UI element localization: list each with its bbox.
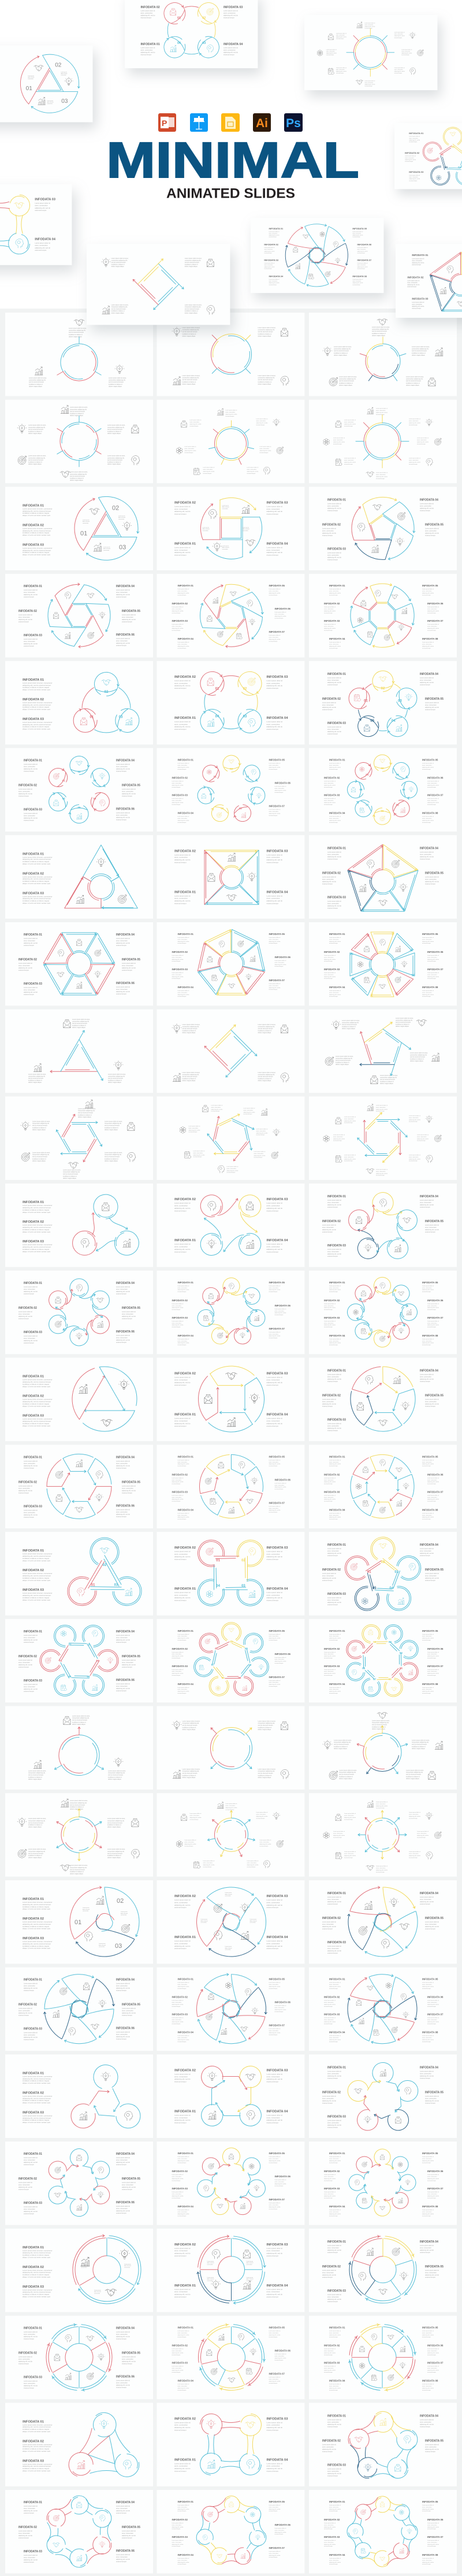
slide: ring 4 [157, 313, 305, 396]
slide: double ring circles 8: 02 [373, 1640, 377, 1643]
slide: segmented circle triangle [5, 474, 160, 582]
slide: numbered circles 3 [5, 661, 158, 758]
slide: numbered circles 6 [5, 748, 153, 832]
slide: outward arrows ring 5 [309, 1706, 457, 1790]
slide: numbered circles 8: 07 [366, 803, 369, 806]
floating slide: top middle, numbered circles [125, 0, 258, 85]
slide: segmented circle inner arrows heptagon [152, 1407, 311, 1566]
slide: numbered circles 7: 07 [210, 793, 213, 796]
slide: aperture swirl 3 [5, 1875, 153, 1969]
slide: double ring circles 6 [5, 1601, 153, 1721]
slide: aperture swirl 8 [309, 1945, 457, 2073]
slide: outward arrows ring 7 [157, 1793, 305, 1877]
slide: double ring circles 8: 01 [362, 1651, 366, 1654]
slide: numbered circles 6: 03 [93, 780, 96, 782]
slide: numbered circles 7: 03 [246, 775, 249, 778]
slide: segmented circle inner arrows pentagon [295, 1311, 462, 1487]
slide: linked circles 4 [157, 1165, 305, 1285]
slide: numbered circles 8: 02 [381, 767, 384, 770]
slide: numbered circles 7: 04 [250, 793, 254, 796]
slide: numbered circles 5: 05 [370, 719, 375, 723]
slide: numbered circles 4: 02 [243, 687, 247, 691]
slide: double ring circles 3: 01 [91, 1584, 95, 1587]
slide: numbered circles 6: 06 [62, 797, 65, 800]
slide: thick ring sectors 4 [157, 2229, 305, 2312]
slide: numbered circles 8: 04 [402, 788, 405, 791]
floating slide: top right, ring with ticks [304, 15, 437, 90]
slide: blob circles 7 [157, 2489, 305, 2576]
slide: aperture swirl 3: 01 [74, 1919, 81, 1926]
slide: ring 7 [157, 400, 305, 483]
slide: aperture swirl 5 [309, 1873, 457, 1970]
icon: Keynote [190, 113, 208, 132]
slide: segmented circle inner arrows hexagon [5, 1426, 153, 1547]
slide: polygon sectors octagon [309, 922, 457, 1005]
slide: ring 6 [5, 400, 153, 483]
slide: numbered circles 6: 05 [77, 806, 81, 809]
slide: linked circles 7 [157, 1271, 305, 1354]
slide: double ring circles 8: 06 [389, 1678, 392, 1681]
slide: numbered circles 6: 04 [93, 797, 96, 800]
slide: numbered circles 4: 03 [243, 715, 247, 718]
slide: segmented circle inner arrows triangle [5, 1342, 162, 1456]
slide: numbered circles 7: 05 [239, 807, 242, 810]
icon: PowerPoint: P [162, 118, 167, 128]
slide: double ring circles 5: 02 [381, 1561, 385, 1564]
title: MINIMAL [106, 132, 359, 188]
icon: Google Slides [221, 113, 240, 132]
floating slide: right, double ring circles [394, 123, 462, 194]
slide: numbered circles 3: 02 [105, 691, 109, 694]
slide: thick ring sectors 8 [309, 2308, 457, 2407]
slide: arrow polygon triangle [5, 1009, 153, 1093]
slide: segmented circle pentagon [309, 463, 457, 593]
slide: outward arrows ring 4 [157, 1706, 305, 1790]
slide: blob circles 5 [309, 2403, 457, 2496]
slide: blob circles 6 [5, 2490, 153, 2574]
slide: outward arrows ring 6 [5, 1793, 153, 1877]
floating slide: lower middle, arrow square [87, 244, 230, 325]
slide: double ring circles 4: 01 [216, 1559, 221, 1562]
slide: double ring circles 6: 02 [68, 1643, 72, 1646]
slide: numbered circles 4 [157, 642, 305, 763]
slide: double ring circles 7: 07 [211, 1664, 214, 1666]
slide: numbered circles 7 [157, 748, 305, 832]
slide: double ring circles 8: 08 [362, 1667, 366, 1670]
slide: polygon sectors hexagon [5, 922, 153, 1005]
slide: double ring circles 8: 07 [373, 1678, 377, 1681]
icon: Photoshop: Ps [286, 117, 301, 130]
slide: polygon sectors pentagon [309, 835, 457, 932]
slide: numbered circles 4: 01 [215, 687, 219, 691]
slide: numbered circles 8: 01 [366, 773, 369, 776]
slide: segmented circle octagon [309, 557, 457, 674]
slide: ring 8 [309, 400, 457, 483]
floating slide: left, segmented circle [0, 34, 99, 133]
slide: segmented circle triangle: 03 [119, 544, 126, 551]
slide: double ring circles 6: 05 [87, 1675, 90, 1678]
slide: linked circles 6 [5, 1271, 153, 1354]
slide: double ring circles 7 [157, 1619, 305, 1704]
slide: double ring circles 6: 03 [87, 1643, 90, 1646]
slide: numbered circles 7: 01 [214, 775, 217, 778]
slide: segmented circle hexagon [5, 567, 153, 665]
slide: arrow polygon square [157, 1009, 305, 1093]
slide: aperture swirl 3: 03 [115, 1943, 122, 1950]
slide: segmented circle triangle: 02 [112, 504, 119, 511]
app icons row [158, 113, 303, 132]
slide: double ring circles 5: 01 [367, 1571, 371, 1574]
slide: arrow polygon hexagon [5, 1097, 153, 1180]
slide: polygon sectors heptagon [157, 920, 305, 1011]
slide: thick ring sectors 6 [5, 2309, 153, 2406]
slide: double ring circles 6: 01 [59, 1659, 62, 1662]
slide: connected circles 5 [309, 2054, 457, 2141]
slide: double ring circles 6: 04 [96, 1659, 99, 1662]
slide: double ring circles 5 [309, 1532, 457, 1621]
slide: numbered circles 8: 05 [396, 803, 399, 806]
slide: segmented circle triangle: 01 [80, 530, 87, 537]
icon: Photoshop [284, 113, 303, 132]
slide: numbered circles 3: 03 [119, 715, 123, 719]
slide: segmented circle square [157, 487, 305, 570]
slide: numbered circles 8: 08 [359, 788, 363, 791]
slide: numbered circles 6: 02 [77, 770, 81, 773]
slide: segmented circle inner arrows square [157, 1353, 305, 1445]
slide: aperture swirl 3: 02 [117, 1898, 124, 1905]
slide: blob circles 3 [5, 2403, 153, 2496]
slide: connected circles 6 [5, 2141, 153, 2225]
slide: double ring circles 3 [5, 1532, 154, 1618]
slide: double ring circles 4 [157, 1508, 305, 1638]
slide: numbered circles 8: 06 [381, 810, 384, 812]
slide: outward arrows ring 3 [5, 1706, 153, 1793]
slide: double ring circles 7: 02 [230, 1640, 233, 1643]
slide: linked circles 3 [5, 1183, 153, 1271]
slide: double ring circles 6: 06 [68, 1675, 72, 1678]
icon: PowerPoint [158, 113, 176, 132]
slide: connected circles 4 [157, 2038, 305, 2154]
slide: aperture swirl 6 [5, 1944, 153, 2074]
slide: linked circles 5 [309, 1183, 457, 1271]
slide: connected circles 3 [5, 2054, 153, 2138]
slide: aperture swirl 7 [157, 1960, 305, 2058]
slide: double ring circles 7: 04 [248, 1664, 252, 1666]
slide: arrow polygon pentagon [309, 1009, 457, 1093]
slide: double ring circles 3: 02 [103, 1564, 107, 1567]
slide: double ring circles 8: 05 [400, 1667, 403, 1670]
slide: double ring circles 5: 04 [389, 1587, 394, 1590]
slide: double ring circles 4: 04 [216, 1584, 221, 1588]
slide: ring 5 [309, 313, 457, 396]
icon: Illustrator [253, 113, 271, 132]
slide: numbered circles 6: 01 [62, 780, 65, 782]
slide: ring 3 [5, 313, 153, 397]
slide: polygon sectors triangle [5, 835, 153, 925]
slide: thick ring sectors 3 [5, 2220, 157, 2319]
slide: double ring circles 4: 02 [241, 1559, 245, 1562]
slide: segmented circle heptagon [157, 543, 305, 688]
slide: polygon sectors square [157, 835, 305, 919]
slide: numbered circles 8 [309, 748, 457, 832]
icon: Illustrator: Ai [256, 117, 268, 130]
slide: numbered circles 5: 03 [398, 699, 402, 703]
slide: numbered circles 7: 06 [221, 807, 224, 810]
slide: double ring circles 7: 03 [245, 1647, 248, 1650]
slide: thick ring sectors 5 [309, 2219, 457, 2319]
slide: blob circles 4 [157, 2384, 305, 2506]
slide: numbered circles 5: 01 [364, 699, 368, 703]
floating slide: left, blob circles [0, 165, 72, 284]
slide: double ring circles 8: 03 [389, 1640, 392, 1643]
slide: arrow polygon octagon [309, 1097, 457, 1180]
floating slide: aperture swirl [251, 198, 383, 313]
slide: numbered circles 4: 04 [215, 715, 219, 718]
slide: linked circles 8 [309, 1271, 457, 1354]
slide: connected circles 8 [309, 2141, 457, 2225]
slide: double ring circles 8 [309, 1606, 457, 1715]
slide: numbered circles 8: 03 [396, 773, 399, 776]
slide: numbered circles 5: 04 [392, 719, 396, 723]
slide: double ring circles 7: 05 [238, 1676, 241, 1679]
slide: double ring circles 3: 03 [114, 1584, 118, 1587]
slide: thick ring sectors 7 [157, 2308, 305, 2407]
slide: double ring circles 7: 06 [222, 1676, 225, 1679]
subtitle: ANIMATED SLIDES [166, 186, 295, 201]
slide: double ring circles 4: 03 [241, 1584, 245, 1588]
slide: segmented circle inner arrows octagon [309, 1428, 457, 1545]
slide: aperture swirl 4 [157, 1872, 305, 1972]
slide: double ring circles 8: 04 [400, 1651, 403, 1654]
slide: double ring circles 7: 01 [215, 1647, 218, 1650]
floating slide: lower right, polygon sectors [396, 244, 462, 329]
slide: numbered circles 5: 02 [381, 687, 385, 691]
slide: double ring circles 5: 05 [372, 1587, 377, 1590]
slide: arrow polygon heptagon [157, 1097, 305, 1180]
slide: numbered circles 3: 01 [90, 715, 94, 719]
slide: numbered circles 5 [309, 659, 457, 758]
slide: double ring circles 5: 03 [394, 1571, 399, 1574]
slide: blob circles 8 [309, 2489, 457, 2574]
slide: outward arrows ring 8 [309, 1793, 457, 1877]
slide: numbered circles 7: 02 [230, 767, 233, 770]
slide: connected circles 7 [157, 2141, 305, 2225]
